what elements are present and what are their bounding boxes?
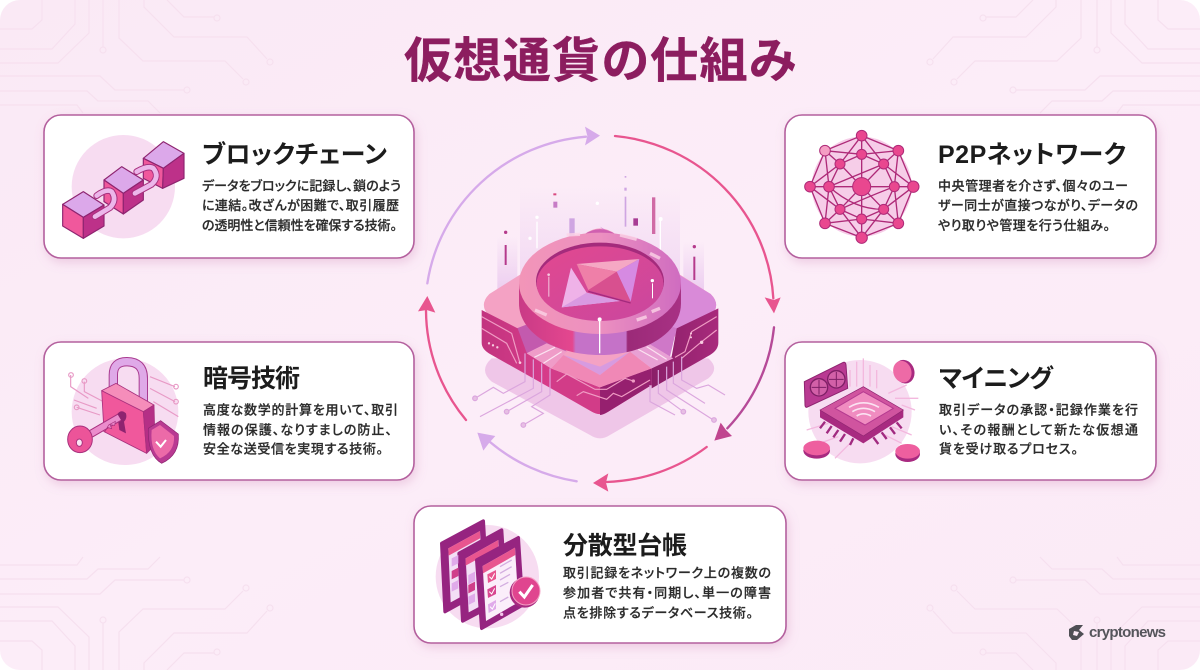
heading: マイニング — [939, 364, 1054, 393]
front block — [551, 368, 652, 414]
icon: ledger tablets — [436, 521, 540, 628]
icon: chain of blocks — [63, 135, 184, 238]
right connector — [630, 343, 673, 368]
text block: 取引データの承認・記録作業を行 — [939, 402, 1138, 418]
right block — [652, 308, 718, 388]
holographic light columns — [497, 176, 704, 310]
text block: ザー同士が直接つながり、データの — [938, 198, 1138, 213]
platform base — [473, 227, 725, 427]
text block: データをブロックに記録し、鎖のよう — [202, 178, 401, 194]
text block: 高度な数学的計算を用いて、取引 — [203, 402, 398, 418]
icon: mining chip — [803, 357, 920, 463]
text block: の透明性と信頼性を確保する技術。 — [202, 218, 397, 233]
arrow: magenta right — [714, 327, 774, 441]
right connector recess — [630, 320, 677, 357]
base circuit traces — [482, 317, 717, 399]
text block — [563, 566, 771, 620]
panel: p2p network — [785, 115, 1156, 258]
panel: cryptography — [44, 342, 414, 480]
arrow: lavender top left — [427, 127, 600, 283]
text block: やり取りや管理を行う仕組み。 — [938, 218, 1110, 233]
text block — [939, 402, 1138, 456]
text block — [938, 178, 1138, 233]
platform shadow — [485, 358, 714, 438]
text block: に連結。改ざんが困難で、取引履歴 — [202, 198, 399, 213]
text block: 参加者で共有・同期し、単一の障害 — [563, 586, 771, 600]
icon: padlock and key — [68, 358, 178, 465]
central illustration — [418, 127, 781, 492]
cycle arrows — [418, 127, 781, 492]
text block — [202, 178, 401, 233]
panel: distributed ledger — [414, 506, 786, 643]
arrow: pink top right — [615, 136, 781, 313]
platform top surface — [484, 228, 716, 376]
text block: 点を排除するデータベース技術。 — [563, 606, 753, 620]
coin — [519, 233, 681, 355]
icon: network — [805, 130, 919, 243]
panel: blockchain — [44, 115, 414, 258]
arrow: pink left — [418, 296, 466, 420]
text block: 中央管理者を介さず、個々のユー — [938, 178, 1128, 194]
icon: logo mark — [1069, 625, 1084, 640]
title: 仮想通貨の仕組み — [404, 35, 796, 88]
text block: 貨を受け取るプロセス。 — [939, 442, 1078, 456]
text block — [203, 402, 398, 456]
heading: 暗号技術 — [203, 365, 300, 393]
heading: P2Pネットワーク — [938, 141, 1126, 169]
text block: 取引記録をネットワーク上の複数の — [563, 566, 771, 580]
heading: 分散型台帳 — [563, 532, 687, 560]
panel: mining — [785, 342, 1156, 480]
text block: い、その報酬として新たな仮想通 — [939, 422, 1138, 438]
ethereum mark — [562, 259, 639, 307]
logo: cryptonews: cryptonews — [1089, 624, 1166, 641]
pin traces — [473, 353, 725, 427]
heading: ブロックチェーン — [202, 140, 387, 169]
left connector recess — [517, 320, 567, 353]
left block — [482, 310, 551, 388]
front band — [551, 352, 652, 387]
chain links — [135, 167, 156, 193]
text block: 安全な送受信を実現する技術。 — [203, 442, 383, 456]
text block: 情報の保護、なりすましの防止、 — [203, 422, 392, 438]
left connector — [527, 343, 567, 368]
arrow: lavender bottom left — [477, 433, 577, 481]
arrow: pink bottom right — [593, 447, 707, 492]
